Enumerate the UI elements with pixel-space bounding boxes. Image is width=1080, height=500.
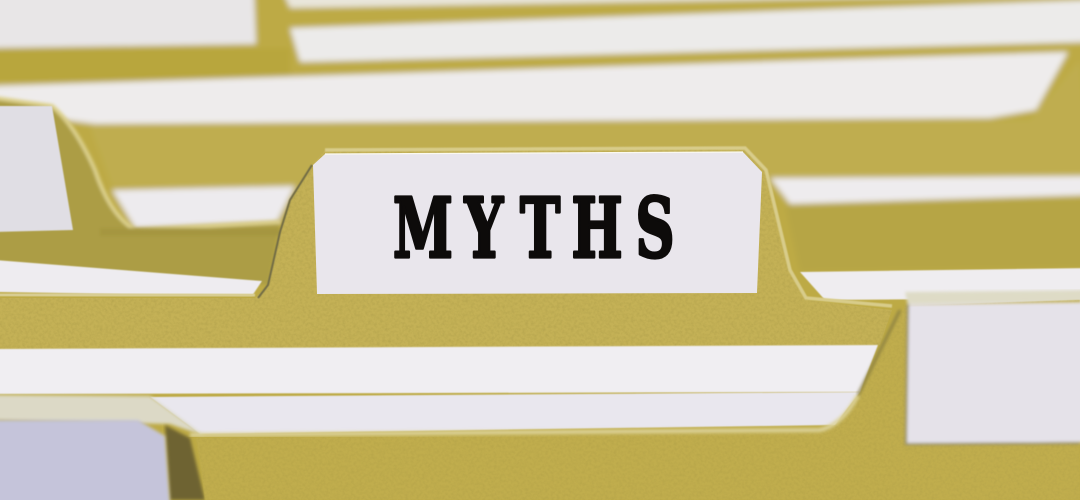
lower right label (906, 302, 1080, 444)
left blurred label (0, 106, 73, 232)
right white strip (800, 268, 1080, 300)
myths tab label (313, 152, 762, 294)
main folder with tab (0, 146, 892, 349)
blurred band above lower left label (0, 395, 205, 436)
dark gap beside lower left label (165, 425, 205, 500)
lower left label (0, 420, 170, 500)
white paper strip upper (0, 345, 878, 394)
left folder tab (0, 98, 280, 285)
left white strip (0, 260, 262, 296)
heading: myths: MYTHS (393, 181, 675, 277)
lower folder (190, 296, 1080, 500)
white paper strip lower (150, 392, 860, 434)
blurred band above lower right label (905, 290, 1080, 306)
